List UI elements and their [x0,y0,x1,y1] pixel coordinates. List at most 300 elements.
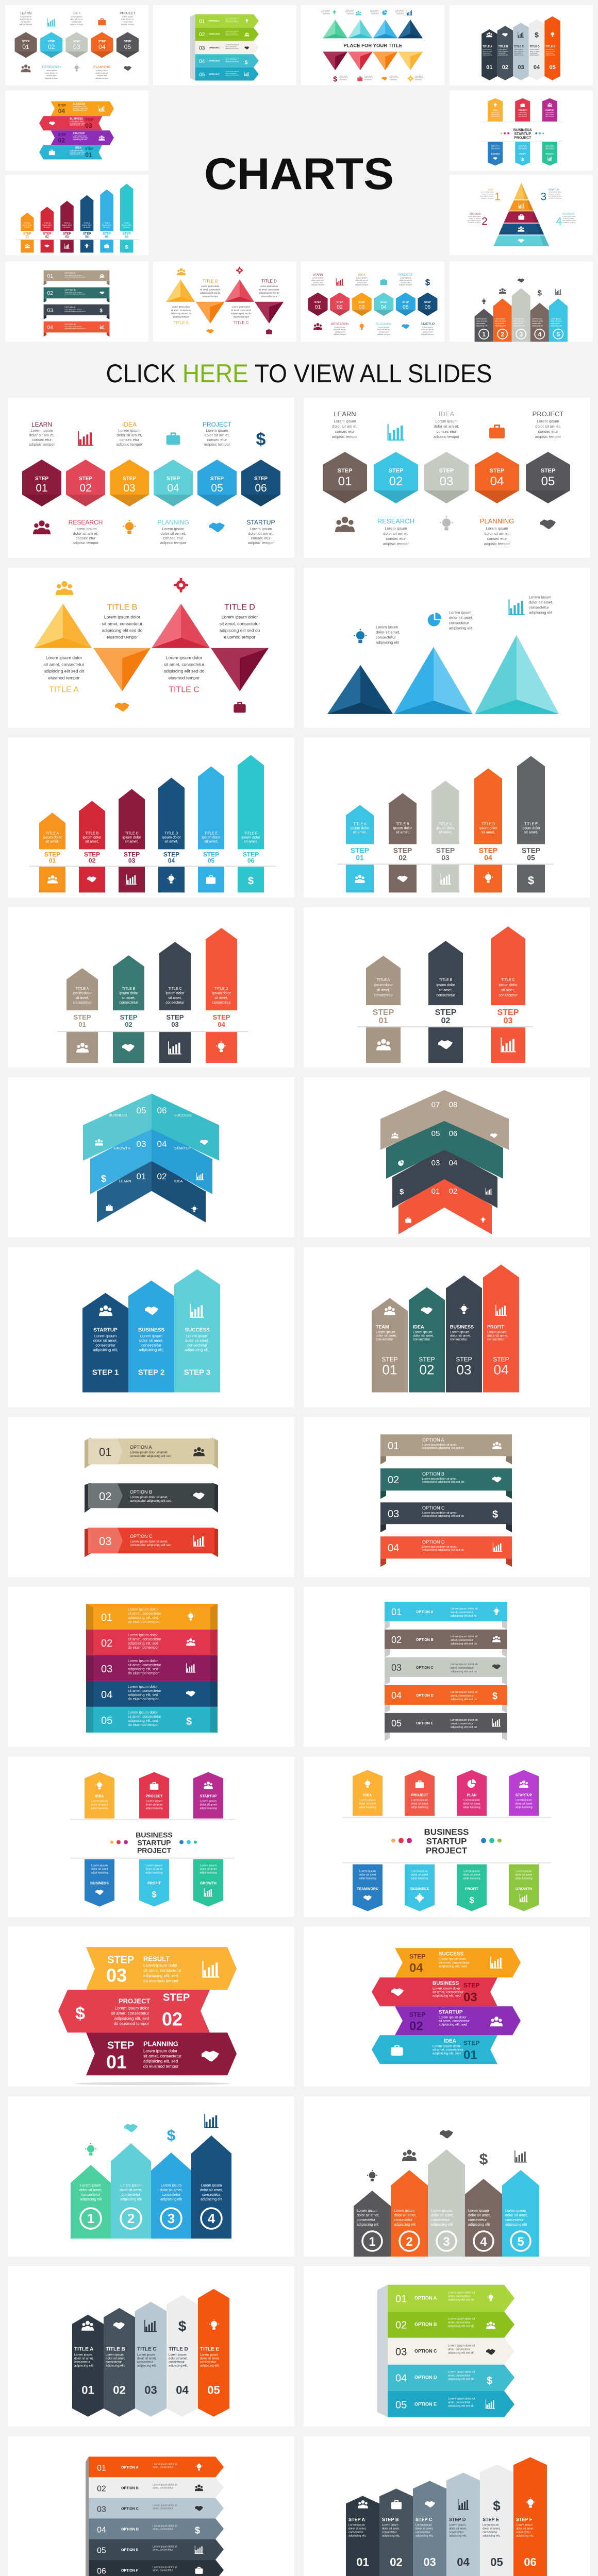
panel: R12L titles A-E bars: 02 [113,2384,126,2397]
panel: R9L business startup project 3: BUSINESS [136,1831,173,1839]
panel: R13R six step bars: consectetur [382,2531,397,2534]
panel: R7R four option ribbons: OPTION B [422,1471,444,1477]
panel: R7R four option ribbons: 01 [388,1440,399,1452]
panel: R8L five stacked bands: 05 [101,1715,112,1726]
panel: R3L six arrow bars: STEP [243,851,259,858]
panel: R3L six arrow bars: sit amet, [244,840,258,843]
panel: R11L four numbered arrows: Lorem ipsum [80,2184,101,2188]
panel: R13R six step bars: consectetur [449,2531,464,2534]
top labels row [29,421,266,449]
panel: R8R five option ribbons: $ [492,1691,497,1701]
panel: R6L three tall arrow steps: SUCCESS [185,1327,210,1333]
panel: R2L triangles titles A-D: eiusmod tempor [107,635,138,640]
panel: R10R zigzag steps 4: STEP [409,1953,425,1960]
panel: R11L four numbered arrows: adipiscing elit [120,2198,142,2201]
panel: R6L three tall arrow steps [8,1247,294,1408]
panel: R4R three arrow bars: TITLE C [501,978,515,982]
panel: R13L six option arrows: amet, consectetur [153,2569,173,2572]
panel: R4L four arrow bars: consectetur [73,1001,92,1005]
panel: R3R five arrow bars: sit amet, [353,831,367,834]
panel: R13R six step bars: consectetur [483,2531,497,2534]
panel: R1R five hexagon steps: consec etur [437,429,457,434]
bottom labels row: dolor sit am et, [160,531,186,536]
panel: R2L triangles titles A-D: eiusmod tempor [169,675,200,681]
panel: R6L three tall arrow steps: Lorem ipsum [186,1333,208,1338]
panel: R4L four arrow bars: ipsum dolor [212,992,231,995]
panel: R12L titles A-E bars: TITLE B [106,2347,125,2352]
panel: R10R zigzag steps 4 [304,1926,590,2087]
panel: R10R zigzag steps 4: STEP [463,1981,479,1989]
panel: R11R five numbered arrows: consectetur [394,2218,413,2222]
panel: R9L business startup project 3: adipi hasicing [200,1872,217,1875]
panel: R9L business startup project 3 [8,1757,294,1917]
panel: R3R five arrow bars: ipsum dolor [479,826,498,830]
panel: R13R six step bars: dolor sit amet, [416,2527,434,2530]
panel: R3L six arrow bars: ipsum dolor [162,836,181,839]
panel: R12R green options 01-05: OPTION D [414,2375,437,2380]
panel: R9R business startup project 4: IDEA [363,1794,372,1798]
bottom labels row: STARTUP [247,519,275,526]
panel: R3L six arrow bars: TITLE B [86,832,98,835]
panel: R6R four arrow steps: STEP [456,1356,472,1363]
panel: R10L zigzag steps 3: PLANNING [143,2040,178,2047]
panel: R11L four numbered arrows: dolor sit amet, [160,2189,182,2192]
panel: R9L business startup project 3: Lorem ipsum [200,1800,217,1803]
panel: R12R green options 01-05: adipiscing elit sed do [448,2352,474,2355]
panel: R7R four option ribbons: Lorem ipsum dolor sit amet, [422,1512,457,1515]
top labels row: $ [256,430,266,449]
panel: R11R five numbered arrows: Lorem ipsum [468,2209,489,2213]
panel: R11L four numbered arrows: 2 [127,2211,135,2226]
panel: R8R five option ribbons: OPTION E [416,1722,434,1725]
panel: R6R four arrow steps: dolor sit amet, [450,1334,471,1337]
panel: R7R four option ribbons: OPTION C [422,1505,445,1511]
panel: R7L three option ribbons: consectetur adipiscing elit sed [130,1544,171,1547]
panel: R5R chevron stack 01-08: 04 [449,1159,457,1167]
panel: R6R four arrow steps: consectetur [376,1337,393,1342]
panel: R8L five stacked bands: sit amet, consectetur [128,1689,161,1693]
panel: R8L five stacked bands: Lorem ipsum dolor [128,1685,158,1689]
panel: R6R four arrow steps: dolor sit amet, [413,1334,434,1337]
panel: R6L three tall arrow steps: STEP 2 [138,1368,164,1377]
panel: R8R five option ribbons: amet, consectetur [451,1639,473,1642]
panel: R10L zigzag steps 3: 02 [162,2008,182,2029]
panel: R6L three tall arrow steps: dolor sit amet, [93,1338,118,1343]
panel: R9L business startup project 3: IDEA [95,1795,104,1799]
panel: R13R six step bars: 05 [490,2555,503,2568]
panel: R9R business startup project 4: Lorem ipsum [516,1799,532,1802]
panel: R6R four arrow steps: IDEA [413,1324,424,1329]
top labels row: consec etur [120,437,140,442]
panel: R13R six step bars: adipiscing elit, [382,2534,400,2537]
panel: R11R five numbered arrows: 4 [480,2235,487,2249]
panel: R7R four option ribbons: consectetur adipiscing elit sed do [422,1549,464,1552]
panel: R2L triangles titles A-D: adipiscing elit sed do [164,669,205,674]
panel: R10R zigzag steps 4: 04 [409,1961,423,1975]
panel: R11R five numbered arrows: adipiscing elit [468,2223,490,2227]
panel: R11R five numbered arrows: 5 [517,2235,524,2249]
hexagons: STEP [79,476,92,482]
panel: R5R chevron stack 01-08: 08 [449,1100,457,1109]
panel: R8L five stacked bands: do eiusmod tempor [128,1646,159,1650]
panel: R3L six arrow bars: TITLE E [205,832,218,835]
panel: R6R four arrow steps: consectetur [487,1337,505,1342]
panel: R3R five arrow bars: sit amet, [396,831,409,834]
panel: R5L chevron stack 01-06: GROWTH [114,1147,130,1150]
panel: R10R zigzag steps 4: adipisicing elit, sed [433,1994,461,1997]
panel: R7L three option ribbons: 03 [99,1535,111,1548]
hexagons: STEP [254,476,268,482]
panel: R8L five stacked bands: 03 [101,1664,112,1675]
panel: R2L triangles titles A-D: eiusmod tempor [48,675,80,681]
panel: R6L three tall arrow steps: adipisicing elit, [93,1348,118,1352]
panel: R9R business startup project 4: adipi hasicing [515,1806,533,1809]
panel: R4L four arrow bars: consectetur [212,1001,231,1005]
panel: R8L five stacked bands [8,1587,294,1747]
panel: R1R five hexagon steps: 03 [440,474,453,488]
panel: R13L six option arrows: OPTION A [121,2466,139,2469]
bottom labels row: adipisic tempor [73,540,99,545]
panel: R7R four option ribbons: 04 [388,1543,399,1554]
panel: R2R blue pyramids: Lorem ipsum [529,595,551,600]
panel: R13L six option arrows: Lorem ipsum dolor sit [153,2463,177,2466]
panel: R2L triangles titles A-D: Lorem ipsum dolor [166,655,202,660]
panel: R2L triangles titles A-D [8,568,294,728]
panel: R5R chevron stack 01-08: 01 [431,1187,440,1196]
panel: R12R green options 01-05: 04 [395,2373,407,2384]
panel: R2R blue pyramids: adipiscing elit [376,640,400,645]
panel: R13L six option arrows: 06 [97,2567,106,2575]
panel: R13R six step bars: STEP E [483,2517,499,2522]
hexagons: 06 [255,482,267,494]
panel: R7L three option ribbons: OPTION B [130,1489,152,1495]
panel: R12R green options 01-05: amet, consectetur [448,2321,471,2325]
panel: R9L business startup project 3: GROWTH [200,1882,217,1886]
panel: R8R five option ribbons: Lorem ipsum dolor sit [451,1663,478,1666]
top labels row: PROJECT [203,421,232,428]
panel: R13R six step bars: consectetur [416,2531,430,2534]
panel: R11R five numbered arrows: consectetur [468,2218,487,2222]
panel: R8R five option ribbons: amet, consectetur [451,1722,473,1725]
panel: R2R blue pyramids: dolor sit amet, [376,630,400,635]
panel: R13L six option arrows: OPTION D [121,2528,139,2531]
panel: R8R five option ribbons: Lorem ipsum dolor sit [451,1691,478,1694]
panel: R3L six arrow bars: ipsum dolor [122,836,141,839]
panel: R5L chevron stack 01-06: 05 [137,1106,146,1115]
panel: R4L four arrow bars: TITLE C [168,987,182,991]
panel: R8L five stacked bands: sit amet, consectetur [128,1715,161,1719]
panel: R5R chevron stack 01-08: 07 [431,1100,440,1109]
panel: R11R five numbered arrows: adipiscing elit [505,2223,527,2227]
panel: R9R business startup project 4: dolor sit amet [515,1803,533,1806]
panel: R6R four arrow steps: Lorem ipsum [487,1330,507,1334]
panel: R5R chevron stack 01-08: 05 [431,1129,440,1138]
panel: R12L titles A-E bars: Lorem ipsum [137,2354,155,2357]
panel: R1R five hexagon steps: dolor sit am et, [383,531,409,536]
panel: R12L titles A-E bars: $ [178,2318,187,2334]
panel: R8R five option ribbons: Lorem ipsum dolor sit [451,1719,478,1722]
top labels row: adipisic tempor [204,442,230,447]
panel: R8L five stacked bands: do eiusmod tempor [128,1698,159,1701]
panel: R1R five hexagon steps: RESEARCH [377,517,414,525]
panel: R11L four numbered arrows: consectetur [162,2193,181,2197]
panel: R9L business startup project 3: PROJECT [137,1846,172,1855]
panel: R6L three tall arrow steps: STEP 3 [184,1368,210,1377]
panel: R13R six step bars: Lorem ipsum [483,2523,499,2527]
panel: R9R business startup project 4: TEAMWORK [357,1888,378,1891]
panel: R6R four arrow steps: 04 [494,1362,508,1378]
top labels row: consec etur [207,437,227,442]
panel: R12R green options 01-05: 03 [395,2347,407,2358]
panel: R2L triangles titles A-D: TITLE C [169,686,200,694]
panel: R12R green options 01-05: adipiscing elit sed do [448,2378,474,2381]
panel: R11R five numbered arrows: consectetur [431,2218,450,2222]
panel: R8L five stacked bands: Lorem ipsum dolor [128,1608,158,1612]
hexagons: 05 [211,482,223,494]
panel: R12R green options 01-05: Lorem ipsum dolor sit [448,2318,475,2321]
panel: R7R four option ribbons [304,1417,590,1577]
panel: R8R five option ribbons: OPTION D [416,1694,434,1698]
panel: R10R zigzag steps 4: Lorem ipsum dolor [439,1957,467,1961]
panel: R7L three option ribbons [8,1417,294,1577]
panel: R8L five stacked bands: Lorem ipsum dolor [128,1634,158,1637]
panel: R9R business startup project 4: adipi hasicing [411,1877,428,1880]
panel: R9L business startup project 3: dolor sit amet [200,1868,217,1871]
panel: R12L titles A-E bars: dolor sit amet, [200,2358,220,2361]
panel: R4R three arrow bars: consectetur [436,994,455,997]
panel: R3R five arrow bars: ipsum dolor [436,826,455,830]
panel: R12R green options 01-05: amet, consectetur [448,2375,471,2378]
panel: R3L six arrow bars: sit amet, [204,840,218,843]
panel: R1R five hexagon steps: IDEA [439,410,454,418]
panel: R13R six step bars: Lorem ipsum [449,2523,466,2527]
panel: R12R green options 01-05: $ [487,2376,492,2387]
title: CHARTS: CHARTS [204,149,394,199]
panel: R12R green options 01-05: OPTION C [414,2349,437,2354]
panel: R9L business startup project 3: STARTUP [200,1795,217,1799]
panel: R3R five arrow bars: $ [528,874,534,887]
panel: R8L five stacked bands: adipisicing elit, sed [128,1642,158,1646]
panel: R9L business startup project 3: STARTUP [137,1839,171,1847]
panel: R9L business startup project 3: Lorem ipsum [91,1865,108,1868]
panel: R6L three tall arrow steps: STEP 1 [92,1368,119,1377]
panel: R8R five option ribbons: adipiscing elit sed do [451,1726,477,1729]
panel: R3R five arrow bars: TITLE A [353,822,367,826]
panel: R1R five hexagon steps: consec etur [538,429,558,434]
panel: R1R five hexagon steps: Lorem ipsum [334,419,356,423]
panel: R11L four numbered arrows: 3 [168,2211,175,2226]
panel: R1R five hexagon steps: adipisic tempor [484,541,510,546]
panel: R1R five hexagon steps: Lorem ipsum [486,526,508,531]
panel: R8R five option ribbons: OPTION B [416,1638,434,1642]
panel: R2R blue pyramids: Lorem ipsum [449,611,471,615]
hexagons: STEP [167,476,180,482]
panel: R2R blue pyramids: consectetur [449,621,469,625]
panel: R5L chevron stack 01-06: IDEA [174,1180,183,1183]
top labels row: adipisic tempor [29,442,55,447]
panel: R8L five stacked bands: do eiusmod tempor [128,1672,159,1675]
panel: R13R six step bars: Lorem ipsum [348,2523,365,2527]
panel: R2L triangles titles A-D: eiusmod tempor [224,635,256,640]
panel: R3L six arrow bars: STEP [163,851,179,858]
panel: R11L four numbered arrows: dolor sit amet, [79,2189,102,2192]
panel: R9L business startup project 3: dolor sit amet [145,1868,163,1871]
panel: R10R zigzag steps 4: adipisicing elit, sed [439,1964,467,1968]
panel: R1R five hexagon steps: PLANNING [480,517,514,525]
panel: R9R business startup project 4: Lorem ipsum [359,1799,376,1802]
panel: R8R five option ribbons [304,1587,590,1747]
panel: R13L six option arrows: amet, consectetur [153,2528,173,2531]
panel: R2R blue pyramids: adipiscing elit [449,626,473,631]
panel: R12R green options 01-05: 01 [395,2294,407,2305]
bottom labels row: adipisic tempor [160,540,187,545]
panel: R13L six option arrows: OPTION F [121,2569,139,2572]
panel: R7L three option ribbons: Lorem ipsum dolor sit amet, [130,1540,168,1544]
panel: R3L six arrow bars: STEP [124,851,140,858]
panel: R9R business startup project 4: BUSINESS [424,1827,469,1837]
panel: R6R four arrow steps [304,1247,590,1408]
panel: R3R five arrow bars: STEP [436,846,455,854]
panel: R6R four arrow steps: 03 [457,1362,471,1378]
panel: R4R three arrow bars: ipsum dolor [374,984,393,987]
panel: R12L titles A-E bars: TITLE A [74,2347,93,2352]
panel: R4R three arrow bars: ipsum dolor [436,984,455,987]
panel: R11R five numbered arrows: 2 [406,2235,413,2249]
panel: R8R five option ribbons: adipiscing elit sed do [451,1670,477,1673]
panel: R11R five numbered arrows: dolor sit amet, [468,2214,491,2217]
panel: R6R four arrow steps: STEP [419,1356,435,1363]
panel: R4R three arrow bars: ipsum dolor [499,984,518,987]
panel: R7R four option ribbons: consectetur adipiscing elit sed do [422,1481,464,1484]
panel: R8R five option ribbons: amet, consectetur [451,1611,473,1614]
panel: R11R five numbered arrows: adipiscing elit [357,2223,378,2227]
panel: R3R five arrow bars: ipsum dolor [351,826,370,830]
panel: R2R blue pyramids: Lorem ipsum [376,625,398,630]
bottom labels row: dolor sit am et, [248,531,274,536]
panel: R11L four numbered arrows: consectetur [81,2193,101,2197]
panel: R2L triangles titles A-D: adipiscing elit sed do [220,628,260,633]
panel: R12R green options 01-05: 02 [395,2320,407,2331]
panel: R11R five numbered arrows: 1 [369,2235,376,2249]
panel: R8L five stacked bands: 02 [101,1638,112,1649]
panel: R3R five arrow bars: 04 [484,853,492,861]
panel: R3R five arrow bars: TITLE C [439,822,452,826]
panel: R11R five numbered arrows: dolor sit amet, [431,2214,454,2217]
panel: R12L titles A-E bars: TITLE E [200,2347,220,2352]
panel: R13L six option arrows: Lorem ipsum dolor sit [153,2566,177,2569]
panel: R11L four numbered arrows: Lorem ipsum [201,2184,222,2188]
panel: R8L five stacked bands: Lorem ipsum dolor [128,1711,158,1715]
panel: R13R six step bars: STEP D [449,2517,466,2522]
panel: R3R five arrow bars: ipsum dolor [393,826,412,830]
panel: R12R green options 01-05: amet, consectetur [448,2295,471,2298]
panel: R6R four arrow steps: Lorem ipsum [376,1330,395,1334]
panel: R11L four numbered arrows: dolor sit amet, [200,2189,223,2192]
panel: R9L business startup project 3: $ [152,1890,157,1900]
panel: R12L titles A-E bars: consectetur [106,2361,122,2364]
panel: R8R five option ribbons: 03 [391,1663,402,1673]
panel: R8L five stacked bands: adipisicing elit, sed [128,1693,158,1697]
hexagons: 02 [79,482,92,494]
panel: R10L zigzag steps 3: do eiusmod tempor [143,2064,179,2069]
panel: R11R five numbered arrows: dolor sit amet, [505,2214,528,2217]
top labels row: Lorem ipsum [30,428,53,433]
panel: R12L titles A-E bars [8,2266,294,2427]
panel: R9R business startup project 4: dolor sit amet [359,1874,376,1877]
panel: R9R business startup project 4: Lorem ipsum [463,1870,480,1873]
panel: R11L four numbered arrows: 4 [208,2211,215,2226]
panel: R6R four arrow steps: PROFIT [487,1324,505,1329]
panel: R9L business startup project 3: PROJECT [145,1795,163,1799]
panel: R2L triangles titles A-D: adipiscing elit sed do [102,628,143,633]
panel: R13L six option arrows: 04 [97,2526,106,2534]
panel: R12R green options 01-05: Lorem ipsum dolor sit [448,2345,475,2348]
top labels row: dolor sit am et, [29,433,55,437]
panel: R1R five hexagon steps: consec etur [335,429,355,434]
bottom labels row: Lorem ipsum [74,527,97,531]
panel: R3L six arrow bars: 03 [128,857,135,864]
panel: R7L three option ribbons: 01 [99,1446,111,1459]
panel: R11L four numbered arrows [8,2096,294,2257]
panel: R9R business startup project 4: adipi hasicing [359,1806,376,1809]
panel: R8R five option ribbons: amet, consectetur [451,1667,473,1670]
panel: R9R business startup project 4: Lorem ipsum [411,1870,428,1873]
panel: R8L five stacked bands: adipisicing elit, sed [128,1616,158,1620]
panel: R8R five option ribbons: 05 [391,1718,402,1728]
panel: R6R four arrow steps: TEAM [376,1324,389,1329]
panel: R13L six option arrows: Lorem ipsum dolor sit [153,2524,177,2528]
panel: R9R business startup project 4: $ [469,1895,474,1905]
panel: R7R four option ribbons: 02 [388,1475,399,1486]
panel: R8R five option ribbons: OPTION A [416,1611,434,1614]
panel: R3L six arrow bars: sit amet, [45,840,59,843]
panel: R11R five numbered arrows: consectetur [505,2218,524,2222]
panel: R12L titles A-E bars: adipiscing elit, [200,2365,220,2368]
panel: R9L business startup project 3: Lorem ipsum [200,1865,217,1868]
panel: R6L three tall arrow steps: STARTUP [93,1327,118,1333]
panel: R3L six arrow bars: TITLE D [164,832,178,835]
panel: R9L business startup project 3: dolor sit amet [91,1804,108,1807]
panel: R12R green options 01-05: amet, consectetur [448,2348,471,2351]
panel: R9R business startup project 4: GROWTH [516,1888,532,1891]
panel: R9R business startup project 4: dolor sit amet [411,1874,428,1877]
panel: R13R six step bars: adipiscing elit, [516,2534,534,2537]
panel: R3L six arrow bars: sit amet, [164,840,178,843]
panel: R8L five stacked bands: sit amet, consectetur [128,1638,161,1641]
panel: R5L chevron stack 01-06: 04 [157,1139,167,1149]
panel: R13R six step bars: adipiscing elit, [449,2534,467,2537]
panel: R2L triangles titles A-D: TITLE A [49,686,79,694]
panel: R11L four numbered arrows: Lorem ipsum [161,2184,181,2188]
panel: R8R five option ribbons: amet, consectetur [451,1694,473,1698]
panel: R13R six step bars: 06 [524,2555,537,2568]
panel: R1R five hexagon steps: STEP [490,468,504,474]
panel: R1R five hexagon steps: STEP [439,468,454,474]
panel: R4R three arrow bars: consectetur [374,994,393,997]
panel: R10R zigzag steps 4: Lorem ipsum dolor [433,1987,461,1990]
panel: R9L business startup project 3: Lorem ipsum [146,1865,162,1868]
panel: R11R five numbered arrows: Lorem ipsum [357,2209,378,2213]
panel: R10R zigzag steps 4: BUSINESS [433,1980,459,1986]
top labels row: LEARN [31,421,52,428]
panel: R10R zigzag steps 4: adipisicing elit, sed [439,2023,467,2026]
panel: R12L titles A-E bars: dolor sit amet, [169,2358,188,2361]
panel: R9R business startup project 4: PROJECT [426,1846,468,1856]
panel: R4R three arrow bars: sit amet, [376,989,390,992]
panel: R5L chevron stack 01-06: 06 [157,1106,167,1115]
panel: R12R green options 01-05: 05 [395,2400,407,2411]
panel: R12L titles A-E bars: TITLE D [169,2347,188,2352]
